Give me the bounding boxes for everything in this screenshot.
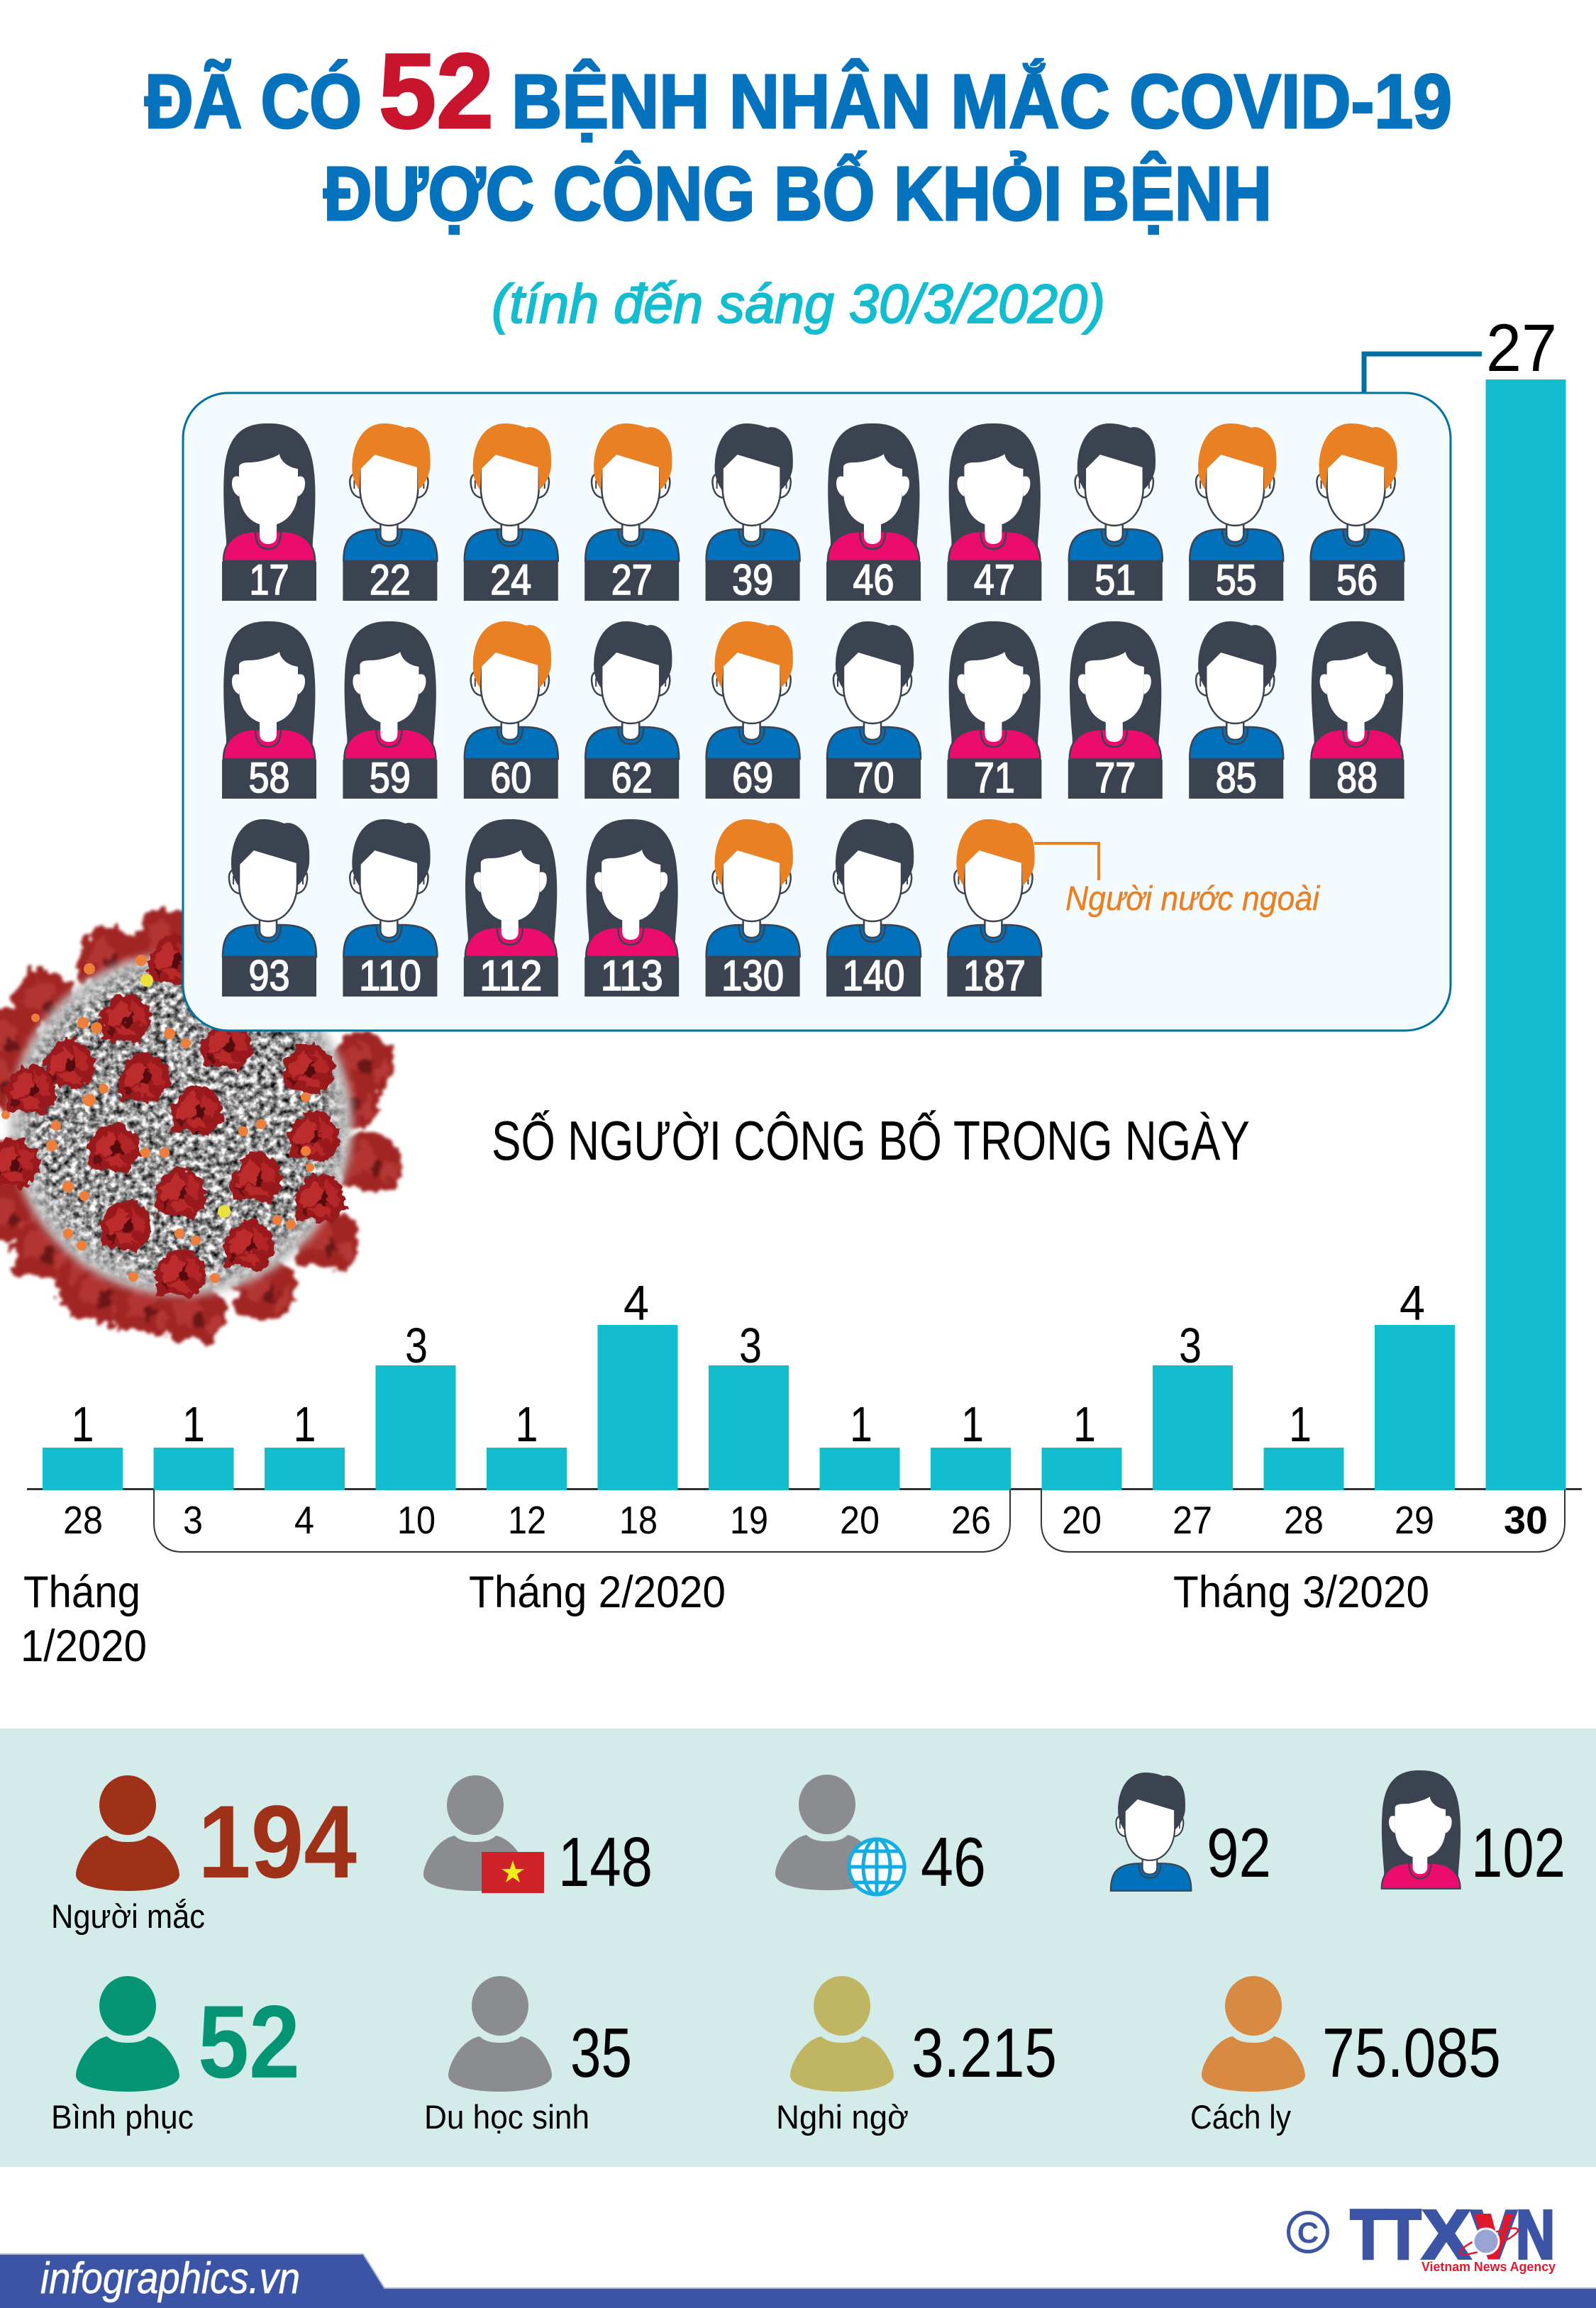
bar values: 1: [515, 1397, 538, 1452]
stat: 102 female: 102: [1471, 1814, 1565, 1892]
patient 46: 46: [853, 556, 894, 604]
panel: recovered patient list: [183, 393, 1451, 1031]
bar values: 3: [739, 1318, 762, 1373]
date labels: 12: [508, 1498, 546, 1542]
bar values: 1: [182, 1397, 205, 1452]
patient 77: [1068, 621, 1163, 801]
patient 113: [584, 819, 679, 999]
date labels: 4: [294, 1498, 314, 1542]
bar values: 1: [1073, 1397, 1096, 1452]
patient 69: 69: [732, 754, 773, 801]
stat: 3.215 suspected: Nghi ngờ: [776, 2098, 909, 2136]
stat: 35 overseas students: 35: [570, 2014, 632, 2092]
stat: 102 female: [1382, 1770, 1565, 1892]
patient 47: 47: [974, 556, 1015, 604]
stat: 75.085 quarantined: Cách ly: [1190, 2098, 1291, 2136]
copyright mark: [1288, 2213, 1328, 2251]
date labels: 18: [619, 1498, 658, 1542]
patient 58: 58: [248, 754, 289, 801]
stat: 3.215 suspected: [776, 1976, 1057, 2136]
stat: 52 recovered: [51, 1976, 300, 2136]
month labels: [21, 1568, 1429, 1671]
panel: statistics: [0, 1729, 1596, 2167]
patient 130: 130: [721, 952, 784, 999]
stat: 46 foreigners: 46: [921, 1823, 986, 1901]
patient 17: [222, 423, 316, 604]
patient 71: [947, 621, 1041, 801]
date labels: 10: [397, 1498, 436, 1542]
logo: TTXVN: V: [1470, 2196, 1517, 2273]
patient 77: 77: [1095, 754, 1136, 801]
bar values: 4: [624, 1275, 649, 1331]
outer blurred spikes: [0, 909, 401, 1343]
patient 22: [343, 423, 437, 604]
date labels: 29: [1395, 1498, 1434, 1542]
patient 60: [464, 621, 558, 801]
bar values: 1: [71, 1397, 94, 1452]
patient 112: [464, 819, 558, 999]
logo globe: [1458, 2224, 1520, 2259]
stat: 52 recovered: 52: [198, 1984, 300, 2099]
title: BỆNH NHÂN MẮC COVID-19: [511, 58, 1452, 144]
date labels: 28: [63, 1498, 103, 1542]
month labels: Tháng: [23, 1568, 140, 1617]
patient 69: [706, 621, 800, 801]
copyright mark: C: [1297, 2216, 1319, 2249]
panel background: [183, 393, 1451, 1031]
stat: 46 foreigners: [775, 1775, 986, 1901]
patient 140: 140: [843, 952, 905, 999]
patient 110: 110: [359, 952, 421, 999]
connector from bar 27 to panel: [1364, 354, 1482, 393]
subtitle: (tính đến sáng 30/3/2020): [492, 274, 1105, 335]
chart heading: SỐ NGƯỜI CÔNG BỐ TRONG NGÀY: [492, 1109, 1250, 1172]
stat: 92 male: [1111, 1772, 1271, 1892]
month labels: Tháng 2/2020: [469, 1568, 726, 1617]
bar values: 3: [1179, 1318, 1202, 1373]
patient 60: 60: [490, 754, 531, 801]
footer website: infographics.vn: [40, 2254, 300, 2303]
patient 113: 113: [601, 952, 663, 999]
patient 51: 51: [1095, 556, 1136, 604]
date labels: 20: [840, 1498, 880, 1542]
stat: 194 infected: Người mắc: [51, 1897, 205, 1935]
patient 70: [826, 621, 921, 801]
patient 93: 93: [248, 952, 289, 999]
stat: 75.085 quarantined: [1190, 1976, 1501, 2136]
patient 59: [343, 621, 437, 801]
foreigner callout: [1034, 843, 1320, 918]
statistics background: [0, 1729, 1596, 2167]
patient 55: 55: [1216, 556, 1257, 604]
stat: 194 infected: [51, 1775, 357, 1935]
patient 22: 22: [370, 556, 411, 604]
month labels: Tháng 3/2020: [1173, 1568, 1429, 1617]
bar values: [71, 311, 1557, 1452]
bar values: 27: [1486, 311, 1557, 386]
title: 52: [379, 31, 494, 150]
month labels: 1/2020: [21, 1621, 147, 1671]
patient 27: [584, 423, 679, 604]
patient 187: 187: [963, 952, 1026, 999]
patient 88: [1310, 621, 1404, 801]
logo: TTXVN: Vietnam News Agency: [1422, 2260, 1556, 2274]
bar values: 4: [1400, 1275, 1425, 1331]
date labels: [63, 1498, 1548, 1542]
bar values: 3: [405, 1318, 428, 1373]
month brackets: [154, 1489, 1565, 1552]
surface spikes: [0, 935, 346, 1299]
bar values: 1: [1289, 1397, 1312, 1452]
stat: 75.085 quarantined: 75.085: [1322, 2014, 1501, 2092]
patient 187: [947, 819, 1041, 999]
logo: TTXVN: TT: [1351, 2196, 1421, 2273]
patient 55: [1189, 423, 1283, 604]
patient 85: 85: [1216, 754, 1257, 801]
patient 39: [706, 423, 800, 604]
patient 140: [826, 819, 921, 999]
patient 85: [1189, 621, 1283, 801]
patient 62: [584, 621, 679, 801]
stat: 52 recovered: Bình phục: [51, 2098, 194, 2136]
patient 24: [464, 423, 558, 604]
date labels: 19: [730, 1498, 768, 1542]
patient 71: 71: [974, 754, 1015, 801]
virus illustration: [0, 909, 401, 1343]
logo: TTXVN: N: [1516, 2196, 1555, 2273]
stat: 148 Vietnamese: [423, 1775, 653, 1901]
virus body: [9, 953, 353, 1296]
patient 62: 62: [611, 754, 653, 801]
patient 17: 17: [250, 556, 289, 604]
date labels: 28: [1284, 1498, 1324, 1542]
title: ĐÃ CÓ: [145, 58, 362, 144]
bars: [43, 379, 1566, 1490]
stat: 92 male: 92: [1207, 1814, 1271, 1892]
bar values: 1: [294, 1397, 316, 1452]
patient 46: [826, 423, 921, 604]
logo: TTXVN: X: [1422, 2196, 1470, 2273]
patient 130: [706, 819, 800, 999]
date labels: 20: [1062, 1498, 1102, 1542]
patient 47: [947, 423, 1041, 604]
patient 39: 39: [732, 556, 773, 604]
patient 110: [343, 819, 437, 999]
patient 27: 27: [611, 556, 653, 604]
date labels: 27: [1173, 1498, 1212, 1542]
date labels: 30: [1504, 1498, 1548, 1542]
stat: 148 Vietnamese: 148: [558, 1823, 653, 1901]
patient 88: 88: [1336, 754, 1378, 801]
patient 112: 112: [480, 952, 542, 999]
bar chart: [21, 311, 1582, 1671]
title: [145, 31, 1452, 236]
stat: 3.215 suspected: 3.215: [911, 2014, 1057, 2092]
patient 58: [222, 621, 316, 801]
bar values: 1: [850, 1397, 872, 1452]
patient 56: 56: [1336, 556, 1378, 604]
stat: 35 overseas students: [424, 1976, 632, 2136]
footer band: [0, 2254, 1596, 2308]
logo: TTXVN: [1288, 2196, 1556, 2274]
bar values: 1: [961, 1397, 984, 1452]
patient 56: [1310, 423, 1404, 604]
patient 51: [1068, 423, 1163, 604]
stat: 194 infected: 194: [198, 1784, 357, 1899]
stat: 35 overseas students: Du học sinh: [424, 2098, 589, 2136]
patient 59: 59: [370, 754, 411, 801]
patient 24: 24: [490, 556, 531, 604]
small orange and yellow particles: [1, 955, 314, 1283]
date labels: 26: [951, 1498, 991, 1542]
foreigner callout: Người nước ngoài: [1065, 880, 1320, 918]
date labels: 3: [183, 1498, 203, 1542]
patient 93: [222, 819, 316, 999]
patient 70: 70: [853, 754, 894, 801]
title: ĐƯỢC CÔNG BỐ KHỎI BỆNH: [323, 150, 1272, 236]
axis: [27, 1488, 1582, 1490]
